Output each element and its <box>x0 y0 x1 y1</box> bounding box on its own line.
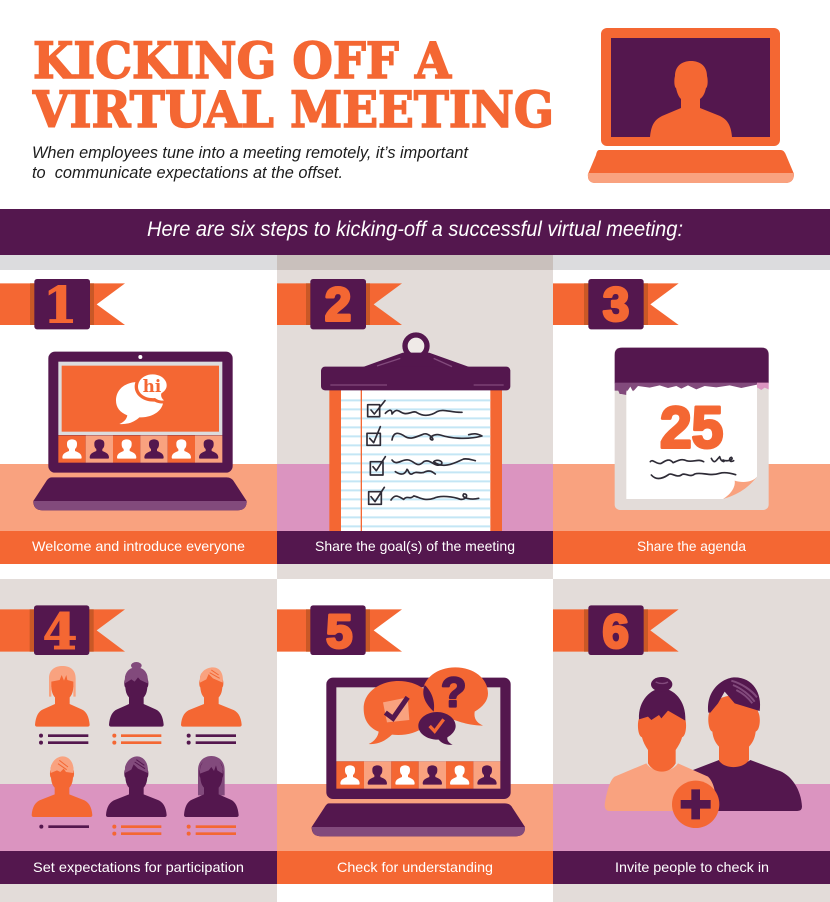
title: KICKING OFF A <box>33 31 452 90</box>
icon: laptop with greeting <box>33 352 247 510</box>
subtitle <box>32 143 469 182</box>
number ribbon 4 <box>0 602 125 661</box>
icon: plus badge <box>672 781 719 828</box>
caption: step 6: Invite people to check in <box>615 859 769 875</box>
icon: clipboard checklist <box>321 335 510 531</box>
caption: step 6 <box>553 851 830 884</box>
list lines: person 5 <box>112 825 161 836</box>
icon: calendar page: 25 <box>660 396 723 461</box>
caption: step 1: Welcome and introduce everyone <box>32 538 245 554</box>
panel: step 1 <box>0 276 277 564</box>
number ribbon 5 <box>277 605 402 658</box>
number ribbon 6 <box>553 605 679 658</box>
caption: step 3 <box>553 531 830 564</box>
icon: man <box>693 677 802 811</box>
icon: laptop with speech bubbles <box>312 667 525 836</box>
icon: person 2 <box>109 662 164 727</box>
number ribbon 4: 4 <box>43 602 77 661</box>
caption: step 2 <box>277 531 553 564</box>
icon: laptop with greeting: hi <box>143 376 161 396</box>
icon: person 6 <box>184 756 239 817</box>
subtitle: When employees tune into a meeting remotely, it’s important <box>32 143 469 162</box>
panel: step 6 <box>553 605 830 884</box>
subtitle: to communicate expectations at the offset. <box>32 163 343 182</box>
panel: step 3 <box>553 279 830 564</box>
panel: step 5 <box>277 605 553 884</box>
icon: person 3 <box>181 667 242 727</box>
caption: step 5 <box>277 851 553 884</box>
list lines: person 6 <box>187 825 236 836</box>
panel: step 2 <box>277 279 553 564</box>
banner <box>0 209 830 255</box>
number ribbon 2: 2 <box>325 279 351 332</box>
caption: step 4 <box>0 851 277 884</box>
icon: laptop with speech bubbles: ? <box>441 669 466 715</box>
list lines: person 1 <box>39 734 88 745</box>
number ribbon 2 <box>277 279 402 332</box>
caption: step 2: Share the goal(s) of the meeting <box>315 538 515 554</box>
icon: header laptop <box>588 28 794 183</box>
panel: step 4 <box>0 602 277 884</box>
icon: person 4 <box>32 756 92 817</box>
caption: step 3: Share the agenda <box>637 538 746 554</box>
list lines: person 4 <box>39 825 89 829</box>
title <box>32 31 554 139</box>
caption: step 5: Check for understanding <box>337 859 493 875</box>
number ribbon 1: 1 <box>43 276 77 334</box>
banner: Here are six steps to kicking-off a successful virtual meeting: <box>147 218 683 241</box>
number ribbon 3: 3 <box>603 279 629 332</box>
caption: step 1 <box>0 531 277 564</box>
icon: person 1 <box>35 666 90 727</box>
list lines: person 2 <box>112 734 161 745</box>
number ribbon 5: 5 <box>326 605 352 658</box>
caption: step 4: Set expectations for participation <box>33 859 244 875</box>
icon: calendar page <box>615 348 769 510</box>
icon: woman <box>605 677 716 811</box>
icon: person 5 <box>106 756 167 817</box>
number ribbon 3 <box>553 279 679 332</box>
title: VIRTUAL MEETING <box>32 80 554 139</box>
number ribbon 1 <box>0 276 125 334</box>
number ribbon 6: 6 <box>603 605 629 658</box>
list lines: person 3 <box>187 734 236 745</box>
